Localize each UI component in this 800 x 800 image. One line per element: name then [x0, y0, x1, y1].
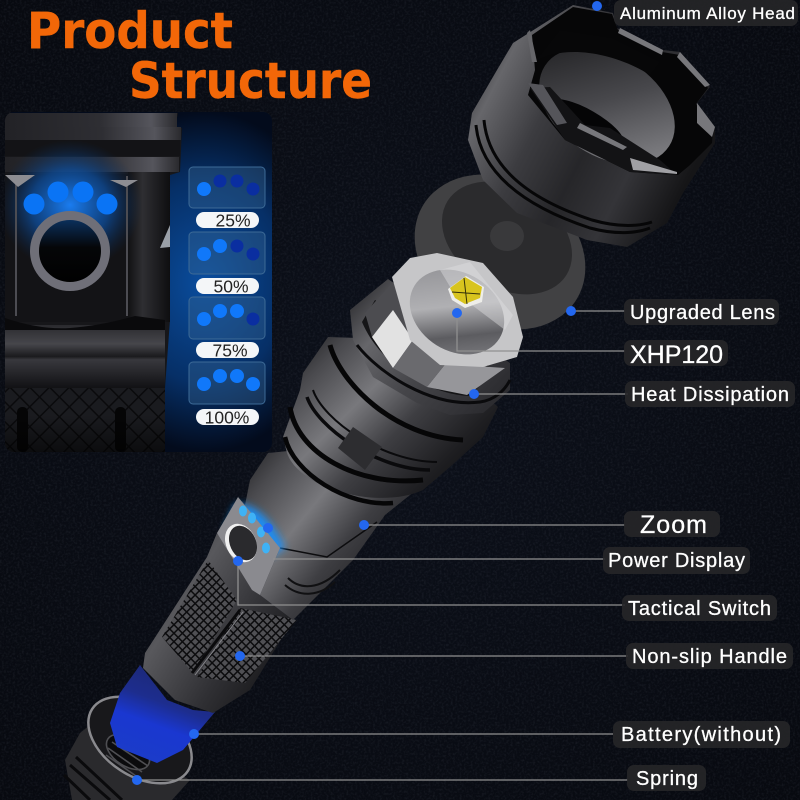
label: Spring: Spring	[636, 768, 698, 790]
key detail	[338, 427, 382, 470]
25%	[189, 167, 265, 230]
label: Spring	[627, 765, 706, 791]
lens	[386, 143, 614, 361]
label: Heat Dissipation: Heat Dissipation	[631, 384, 789, 406]
level indicators	[189, 167, 265, 428]
75%	[189, 297, 265, 360]
label: Tactical Switch: Tactical Switch	[628, 598, 771, 620]
crown teeth	[527, 28, 715, 174]
label: Aluminum Alloy Head	[614, 0, 798, 26]
handle	[143, 533, 297, 713]
lower collar	[5, 325, 165, 378]
aluminum head	[468, 5, 715, 247]
led row	[239, 506, 270, 554]
100%: 100%	[205, 408, 249, 428]
label: Aluminum Alloy Head: Aluminum Alloy Head	[620, 4, 795, 23]
crown opening	[528, 7, 713, 175]
label: Zoom: Zoom	[640, 511, 707, 539]
switch ring	[34, 216, 106, 286]
button	[219, 519, 263, 567]
spring	[100, 727, 156, 777]
label: Zoom	[624, 511, 720, 539]
title: Product	[27, 2, 233, 60]
zoom barrel with threads	[283, 337, 498, 503]
blue glow face	[5, 174, 128, 322]
heat sink collar	[350, 279, 510, 415]
75%: 75%	[212, 340, 248, 360]
marker dots	[132, 1, 602, 785]
25%: 25%	[215, 210, 251, 230]
neck under switch	[238, 440, 435, 620]
LED head	[365, 252, 523, 395]
switch plate	[217, 497, 285, 595]
battery section	[110, 665, 215, 763]
label: Non-slip Handle: Non-slip Handle	[632, 646, 787, 668]
title	[27, 2, 372, 110]
leader lines	[137, 311, 628, 780]
labels	[603, 0, 798, 791]
label: Power Display: Power Display	[608, 550, 745, 572]
label: XHP120: XHP120	[630, 341, 723, 369]
50%	[189, 232, 265, 296]
title: Structure	[129, 52, 372, 110]
tail cap	[64, 679, 207, 800]
label: Upgraded Lens: Upgraded Lens	[630, 302, 775, 324]
LED chip	[448, 276, 484, 308]
knurled grip	[5, 388, 165, 444]
led dots	[24, 182, 118, 214]
50%: 50%	[213, 276, 249, 296]
100%	[189, 362, 265, 428]
panel: power level inset	[0, 112, 272, 452]
close-up flashlight body	[0, 113, 182, 452]
label: Battery(without): Battery(without)	[621, 724, 781, 746]
